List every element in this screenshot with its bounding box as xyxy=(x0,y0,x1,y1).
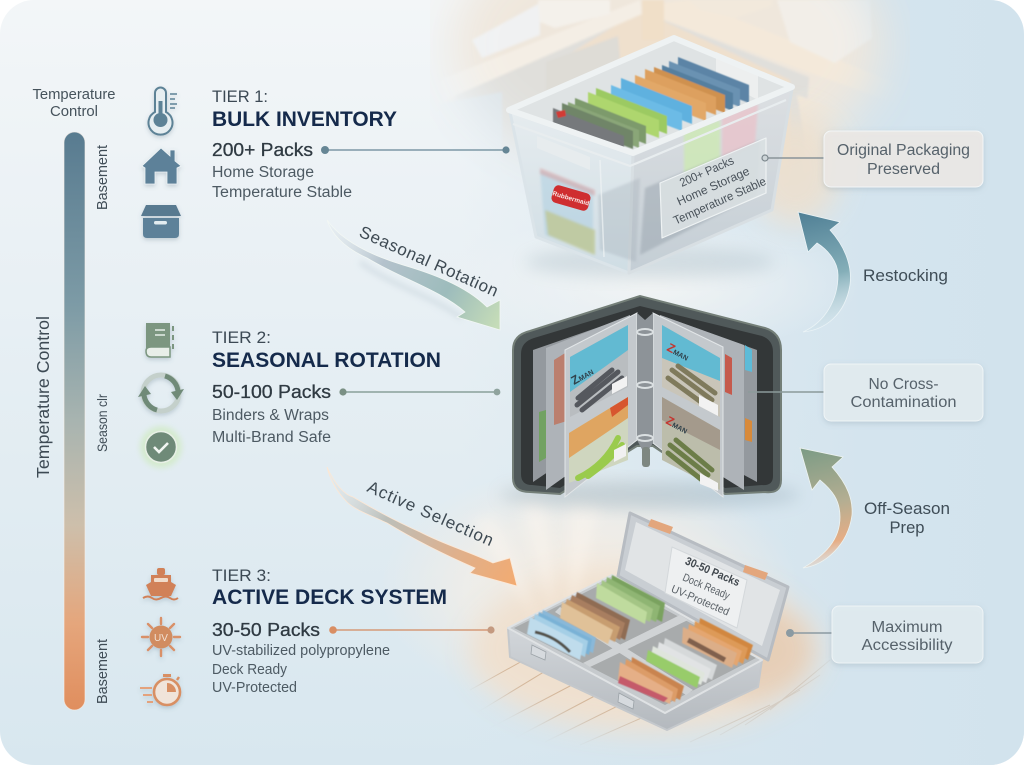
callout: maximum accessibility: Maximum xyxy=(872,619,942,636)
tier 1 detail line 2: Temperature Stable xyxy=(212,184,352,201)
left shelf board xyxy=(476,3,642,85)
gradient temperature bar xyxy=(64,132,85,710)
soft highlight rays xyxy=(470,500,600,625)
bin latch xyxy=(537,136,590,170)
icon: rotation cycle xyxy=(138,375,184,411)
callout: original packaging preserved: Preserved xyxy=(867,161,940,178)
binder spine and rings xyxy=(637,313,653,455)
tier 3 pack count: 30-50 Packs xyxy=(212,619,320,640)
icon: UV sun xyxy=(142,618,180,656)
tier 3 detail line 1: UV-stabilized polypropylene xyxy=(212,643,390,659)
compartment packs: green xyxy=(596,575,665,624)
icon: house xyxy=(142,148,181,184)
box base xyxy=(508,628,762,730)
vertical label: basement top: Basement xyxy=(95,145,111,210)
packs visible through bin xyxy=(540,104,760,262)
temperature control scale xyxy=(32,87,116,710)
tier 1 pack count: 200+ Packs xyxy=(212,139,313,160)
rows of bagged lures xyxy=(553,57,749,154)
left bottom lure card xyxy=(569,397,628,483)
vertical label: temperature control: Temperature Control xyxy=(33,316,53,478)
warm floor patch beside bin xyxy=(750,115,840,225)
lid label text: 30-50 Packs xyxy=(683,555,741,589)
callout: original packaging preserved: Original Packaging xyxy=(837,142,970,159)
callout: maximum accessibility: Accessibility xyxy=(862,637,953,654)
icon: stopwatch xyxy=(140,674,180,705)
compartment packs: blue xyxy=(527,610,596,660)
callout: no cross-contamination xyxy=(748,364,983,421)
right bottom lure card xyxy=(662,397,720,491)
arrow label: active selection: Active Selection xyxy=(364,477,496,550)
front right page xyxy=(653,313,723,497)
left top lure card: ZMAN xyxy=(568,364,596,388)
arrow label line 2: Prep xyxy=(890,518,924,537)
shelf bins xyxy=(472,3,540,58)
icon: thermometer xyxy=(148,88,177,135)
bin label card xyxy=(660,138,766,238)
compartment packs: grey and green xyxy=(646,638,717,688)
connector: tier 3 to tackle box xyxy=(329,626,495,634)
tier 2 text block xyxy=(212,328,441,446)
icon: storage box xyxy=(141,205,181,238)
heading: temperature control: Temperature xyxy=(32,87,116,103)
lid label card xyxy=(665,547,747,628)
bin front faces xyxy=(510,112,633,273)
tier 1 text block xyxy=(212,87,397,201)
tier 2 label: TIER 2: xyxy=(212,328,271,347)
tackle box xyxy=(508,513,788,730)
lid label text: UV-Protected xyxy=(669,583,731,618)
arrow: seasonal rotation xyxy=(327,220,501,330)
bin label text: 200+ Packs xyxy=(677,153,736,190)
arrow: restocking xyxy=(798,212,948,332)
right top lure card: ZMAN xyxy=(665,340,692,364)
callout: no cross-contamination: Contamination xyxy=(850,394,956,411)
tier 2 detail line 1: Binders & Wraps xyxy=(212,407,329,424)
lid xyxy=(618,513,788,660)
callout: maximum accessibility xyxy=(786,606,983,663)
arrow label: seasonal rotation: Seasonal Rotation xyxy=(356,222,501,301)
box latches xyxy=(531,645,546,660)
compartment packs: orange and red xyxy=(618,657,684,704)
icon: ship xyxy=(143,568,178,600)
compartment walls xyxy=(555,607,693,695)
lid hinges xyxy=(648,519,673,534)
rubbermaid style red label xyxy=(550,184,592,212)
tier 2 title: SEASONAL ROTATION xyxy=(212,349,441,372)
icon: check badge xyxy=(140,426,182,468)
back pages xyxy=(533,318,625,482)
right bottom lure card: ZMAN xyxy=(664,413,691,437)
front left page xyxy=(565,313,637,497)
wood deck floor xyxy=(464,565,830,744)
connector: tier 2 to binder xyxy=(339,388,500,396)
shelf post xyxy=(642,0,664,21)
arrow label: off-season prep: Off-Season xyxy=(864,499,950,518)
vertical label: basement bottom: Basement xyxy=(95,639,111,704)
bin label text: Home Storage xyxy=(675,164,752,208)
arrow: off-season prep xyxy=(800,448,950,568)
arrow label: restocking: Restocking xyxy=(863,266,948,285)
callout: no cross-contamination: No Cross- xyxy=(868,376,938,393)
lid label text xyxy=(669,555,743,618)
bin label text: Temperature Stable xyxy=(671,174,768,228)
shelf wall xyxy=(474,26,808,128)
tier 1 detail line 1: Home Storage xyxy=(212,164,314,181)
pale floor glow under bin xyxy=(440,215,860,355)
rubbermaid style red label: Rubbermaid xyxy=(552,190,590,208)
left top lure card xyxy=(568,325,628,417)
right shelf board xyxy=(664,0,900,105)
warm glow behind tackle box xyxy=(380,465,800,715)
tier 1 title: BULK INVENTORY xyxy=(212,108,397,131)
vertical label: season clr: Season clr xyxy=(94,394,110,452)
icon: UV sun: UV xyxy=(154,633,168,644)
heading line 2: Control xyxy=(50,104,98,120)
tier 2 detail line 2: Multi-Brand Safe xyxy=(212,429,331,446)
tier 1 label: TIER 1: xyxy=(212,87,268,106)
compartment packs: orange xyxy=(682,618,753,668)
bin interior xyxy=(509,38,792,153)
tier 3 detail line 2: Deck Ready xyxy=(212,662,288,678)
divider tab xyxy=(716,52,758,100)
tier 3 label: TIER 3: xyxy=(212,566,271,585)
connector: tier 1 to bin xyxy=(321,146,510,154)
tier 3 title: ACTIVE DECK SYSTEM xyxy=(212,586,447,609)
icon: notebook xyxy=(146,323,173,357)
background scene: storage shelves xyxy=(444,0,892,148)
right top lure card xyxy=(662,325,720,417)
tier 3 text block xyxy=(212,566,447,696)
compartment packs: tan brown xyxy=(560,592,630,644)
plastic storage bin xyxy=(509,38,792,278)
tier 3 detail line 3: UV-Protected xyxy=(212,680,297,696)
zipper binder xyxy=(500,296,800,509)
tier 2 pack count: 50-100 Packs xyxy=(212,381,331,402)
arrow: active selection xyxy=(327,467,517,586)
binder cover xyxy=(513,296,781,494)
lid label text: Dock Ready xyxy=(681,572,732,602)
bin label text xyxy=(658,145,768,228)
bin rim xyxy=(509,38,792,153)
callout: original packaging preserved xyxy=(762,131,983,187)
